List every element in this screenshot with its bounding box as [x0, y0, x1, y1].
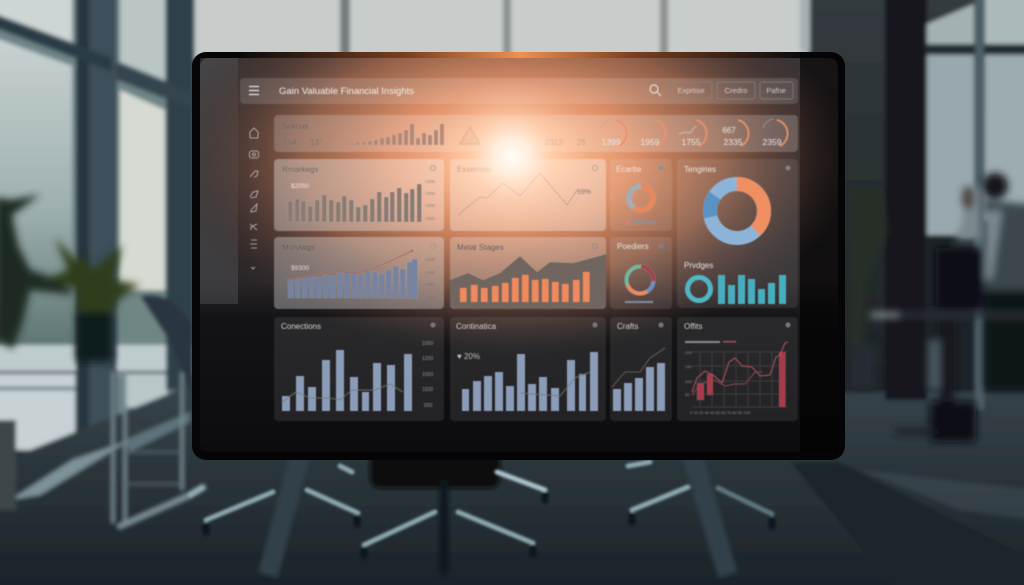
lower windows and table top — [0, 345, 195, 375]
panel: continuance: ♥ 20% — [457, 352, 480, 361]
panel: preferences — [610, 237, 672, 309]
chairs under monitor — [190, 450, 772, 575]
panel: offers: 50 — [685, 392, 690, 397]
panel: rising: 1000 — [425, 216, 436, 221]
icon: menu — [249, 86, 259, 94]
panel: offers: 150 — [685, 364, 692, 369]
donut — [705, 179, 769, 243]
sun flare — [432, 76, 592, 236]
monitor bezel — [192, 52, 845, 460]
panel: small donut: Ecartte — [616, 165, 642, 174]
panel: mortgages: 1000 — [425, 295, 436, 300]
summary strip: 1959 — [641, 137, 660, 147]
left frames — [76, 0, 89, 440]
panel: offers: 100 — [685, 379, 692, 384]
panel: templates and progress — [677, 159, 798, 308]
top bar — [240, 78, 798, 104]
panel: expenses: Exsemias — [457, 165, 492, 174]
panel: offers: Offits — [684, 322, 703, 331]
panel: rising: 1000 — [425, 191, 436, 196]
floor — [0, 385, 1024, 585]
gauges — [601, 119, 788, 146]
top bar: Credro — [725, 86, 747, 95]
panel: conversions: 1000 — [422, 372, 433, 378]
top windows — [195, 0, 810, 60]
panel: conversions: 1500 — [422, 387, 433, 393]
panel: rising: $2050 — [291, 183, 309, 190]
summary strip: 154 — [283, 138, 297, 147]
donut — [622, 262, 658, 298]
plants — [0, 188, 888, 390]
summary strip: 1399 — [602, 137, 621, 147]
table frame — [113, 372, 182, 523]
left windows — [0, 0, 195, 440]
small pot — [0, 420, 16, 510]
panel: rising: 1000 — [425, 179, 436, 184]
panel: mortgages: $9300 — [291, 265, 309, 272]
panel: metal stages: Metal Stages — [457, 243, 504, 252]
panel: expenses — [450, 159, 606, 231]
panel: offers: 0 10 20 30 40 50 60 70 80 90 100 — [690, 410, 751, 415]
right wall — [808, 0, 1024, 392]
panel: mortgages: Morytags — [282, 243, 315, 252]
screen glow — [200, 58, 838, 452]
panel: continuance — [450, 317, 606, 421]
summary strip: 1755 — [682, 137, 701, 147]
summary strip: 2313 — [545, 138, 563, 147]
donut — [629, 186, 653, 210]
top bar: Exprtise — [677, 86, 705, 95]
panel: metal stages — [450, 237, 606, 309]
panel: mortgages: 1000 — [425, 282, 436, 287]
icon: search — [650, 85, 661, 96]
summary strip: 25 — [577, 138, 586, 147]
panel: conversions: Conections — [281, 322, 321, 331]
panel: mortgages: 1000 — [425, 257, 436, 262]
panel: preferences: Poediers — [617, 242, 649, 251]
panel: expenses: 59% — [577, 189, 591, 196]
people silhouettes — [868, 173, 1024, 442]
summary strip: 2335 — [724, 137, 743, 147]
buttons — [671, 82, 793, 99]
warning triangle — [460, 127, 480, 144]
panel: conversions — [274, 317, 444, 421]
chair back — [140, 295, 192, 395]
panel: mortgages — [274, 237, 444, 309]
panel: rising: 1000 — [425, 203, 436, 208]
panel: offers — [677, 317, 798, 421]
panel: rising — [274, 159, 444, 231]
panel: templates and progress: Tengiries — [684, 165, 716, 174]
summary strip — [274, 115, 798, 152]
panel: templates and progress: Prvdges — [684, 261, 713, 270]
teal ring — [688, 278, 710, 300]
summary strip: 13⁷ — [310, 138, 322, 147]
panel: continuance: Continatica — [456, 322, 497, 331]
monitor — [192, 52, 845, 460]
strip sparkline bars — [332, 124, 444, 145]
summary strip: 667 — [722, 126, 736, 135]
panel: conversions: 1200 — [422, 356, 433, 362]
panel: rising: Rmarkegs — [282, 165, 318, 174]
summary strip: Sorcus — [282, 121, 308, 131]
app title: Gain Valuable Financial Insights — [279, 86, 414, 97]
top bar: Pafne — [766, 86, 786, 95]
panel: conversions: 000 — [424, 403, 433, 409]
panel: conversions: 1000 — [422, 341, 433, 347]
panel: small donut — [610, 159, 672, 231]
screen — [200, 58, 838, 452]
panel: crafts — [610, 317, 672, 421]
sidebar icons — [250, 128, 258, 269]
panel: mortgages: 1000 — [425, 270, 436, 275]
panel: crafts: Crafts — [617, 322, 638, 331]
teal bars — [718, 275, 786, 304]
summary strip: 2359 — [763, 137, 782, 147]
panel: offers: 200 — [685, 350, 692, 355]
